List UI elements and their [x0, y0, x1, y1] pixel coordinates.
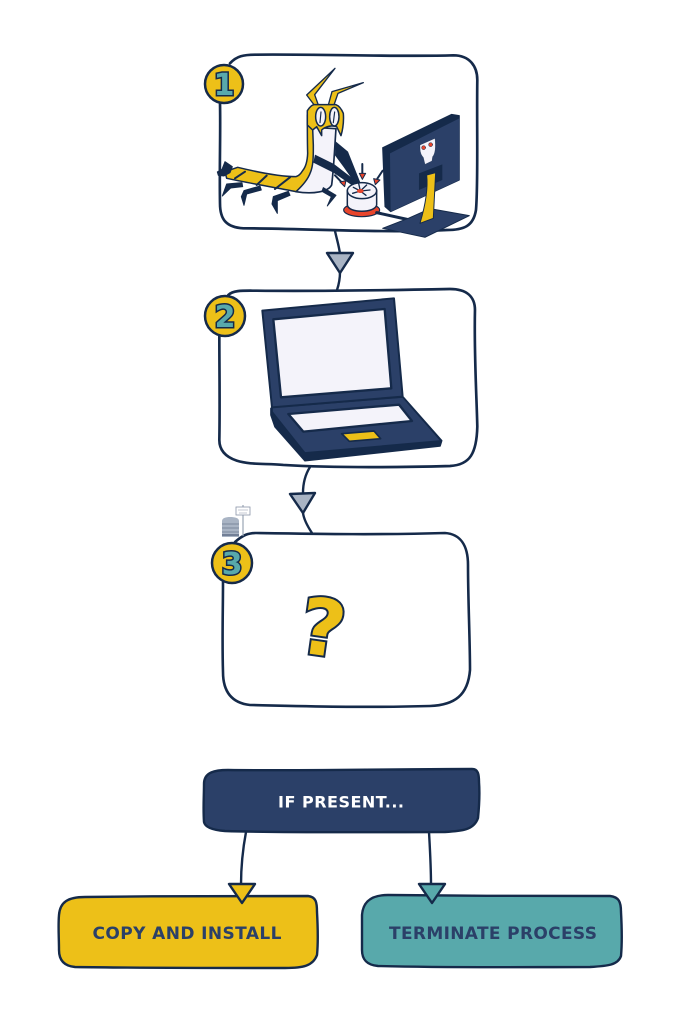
- box: terminate process: [362, 895, 622, 967]
- badge 1: [205, 65, 243, 103]
- badge 2: [205, 296, 245, 336]
- badge 3: 3: [222, 547, 242, 582]
- arrowhead: yellow: [229, 884, 255, 903]
- decision box: if present: IF PRESENT...: [278, 792, 404, 812]
- red button: [344, 183, 380, 217]
- monitor with skull: [377, 114, 469, 237]
- panel 2: laptop: [219, 289, 477, 467]
- arrow to terminate process: [429, 832, 431, 885]
- question mark: ?: [294, 582, 351, 677]
- panel 2 outline: [219, 289, 477, 467]
- box: terminate process: TERMINATE PROCESS: [389, 924, 597, 944]
- arrow to copy and install: [241, 832, 246, 885]
- laptop: [262, 298, 442, 461]
- badge 3: [212, 543, 252, 583]
- arrow 2 to 3: [290, 467, 315, 533]
- box: copy and install: COPY AND INSTALL: [92, 924, 282, 944]
- panel 1 outline: [220, 55, 477, 231]
- icon: server and signpost: [222, 505, 250, 537]
- arrowhead: teal: [419, 884, 445, 903]
- impact arrows: [335, 164, 383, 187]
- box: copy and install: [59, 896, 318, 968]
- badge 1: 1: [214, 68, 234, 103]
- badge 2: 2: [215, 300, 235, 335]
- arrow 1 to 2: [327, 231, 353, 290]
- insect character: [217, 68, 363, 213]
- panel 1: insect pressing button at monitor: [217, 55, 477, 237]
- decision box: if present: [204, 769, 479, 832]
- panel 3 outline: [223, 533, 470, 707]
